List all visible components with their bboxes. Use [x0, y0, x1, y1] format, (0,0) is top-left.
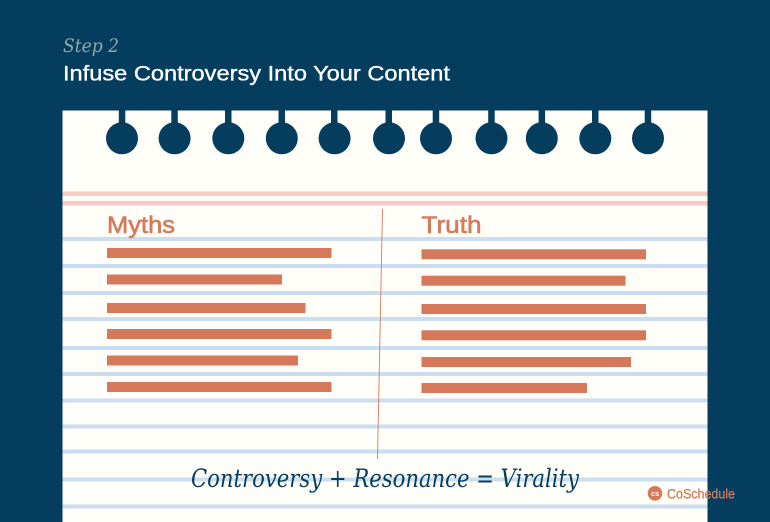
logo wordmark: CoSchedule [667, 486, 735, 502]
logo: CoSchedule [648, 486, 735, 502]
panel: myths column [107, 212, 332, 392]
equation: Controversy + Resonance = Virality [191, 464, 580, 493]
panel: truth column [422, 212, 646, 393]
panel: notebook paper [62, 110, 708, 522]
title: Infuse Controversy Into Your Content [63, 62, 450, 86]
truth text placeholder bars [422, 249, 646, 393]
step label: Step 2 [63, 35, 119, 57]
heading: truth: Truth [422, 212, 482, 239]
icon: logo mark: cs [651, 489, 659, 498]
heading: myths: Myths [107, 212, 175, 239]
spiral binding holes [106, 110, 664, 154]
myths text placeholder bars [107, 248, 332, 392]
column divider [378, 209, 382, 459]
